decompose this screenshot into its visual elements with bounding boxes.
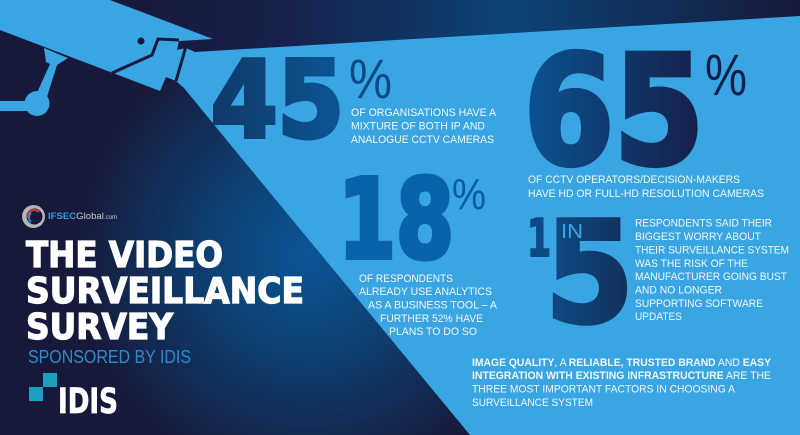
camera lens dot <box>138 38 144 44</box>
background: dark wedge under the camera <box>0 30 470 435</box>
number 65: 65 <box>524 25 704 199</box>
sponsor line: SPONSORED BY IDIS <box>28 347 191 367</box>
65 description: OF CCTV OPERATORS/DECISION-MAKERS <box>528 174 740 186</box>
logo wordmark: IDIS <box>58 382 118 422</box>
45 description: MIXTURE OF BOTH IP AND <box>351 120 485 132</box>
logo: IFSEC Global <box>22 205 117 228</box>
65 description: HAVE HD OR FULL-HD RESOLUTION CAMERAS <box>528 188 764 200</box>
background: dark band at top right <box>110 0 800 52</box>
number 18: 18 <box>338 156 454 284</box>
1 in 5 description: SUPPORTING SOFTWARE <box>635 298 763 310</box>
45 description: OF ORGANISATIONS HAVE A <box>351 107 497 119</box>
text block: most important factors: THREE MOST IMPORTANT FACTORS IN CHOOSING A <box>472 384 736 396</box>
percent sign: % <box>349 47 392 110</box>
logo wordmark: IFSECGlobal.com <box>48 211 117 222</box>
camera mount <box>36 48 68 97</box>
logo: IDIS <box>29 373 118 422</box>
1 in 5 description: BIGGEST WORRY ABOUT <box>635 231 762 243</box>
stat: 1 in 5 <box>527 192 789 356</box>
title: SURVEILLANCE <box>26 271 304 312</box>
stat: 18 percent <box>338 156 498 338</box>
45 description: ANALOGUE CCTV CAMERAS <box>351 134 494 146</box>
1 in 5 description: RESPONDENTS SAID THEIR <box>635 218 772 230</box>
stat: 45 percent <box>211 40 497 162</box>
number 1: 1 <box>527 209 551 269</box>
18 description: OF RESPONDENTS <box>359 273 453 285</box>
number 45: 45 <box>211 40 344 162</box>
number 5: 5 <box>545 192 634 356</box>
title: SURVEY <box>26 307 174 348</box>
1 in 5 description: MANUFACTURER GOING BUST <box>635 271 787 283</box>
text block: most important factors: IMAGE QUALITY, A RELIABLE, TRUSTED BRAND AND EASY <box>472 357 772 369</box>
logo roundel <box>22 205 45 228</box>
percent sign: % <box>705 43 747 108</box>
18 description: AS A BUSINESS TOOL – A <box>368 300 498 312</box>
word IN: IN <box>561 220 583 243</box>
1 in 5 description: AND NO LONGER <box>635 284 722 296</box>
icon: surveillance camera <box>0 38 186 116</box>
text block: most important factors: INTEGRATION WITH EXISTING INFRASTRUCTURE ARE THE <box>472 370 772 382</box>
1 in 5 description: WAS THE RISK OF THE <box>635 258 748 270</box>
18 description: PLANS TO DO SO <box>389 326 477 338</box>
18 description: FURTHER 52% HAVE <box>380 313 483 325</box>
18 description: ALREADY USE ANALYTICS <box>359 286 492 298</box>
1 in 5 description: UPDATES <box>635 311 682 323</box>
title: THE VIDEO <box>26 235 223 276</box>
text block: most important factors: SURVEILLANCE SYSTEM <box>472 397 593 409</box>
1 in 5 description: THEIR SURVEILLANCE SYSTEM <box>635 244 789 256</box>
percent sign: % <box>452 170 486 219</box>
logo mark <box>29 373 57 401</box>
stat: 65 percent <box>524 25 764 200</box>
